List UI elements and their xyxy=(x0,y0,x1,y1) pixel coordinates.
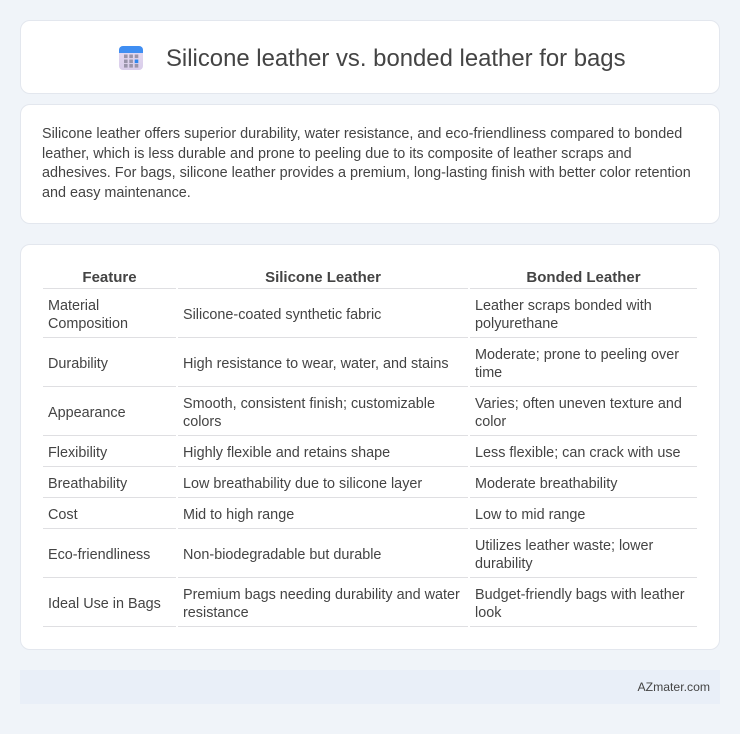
row: durability: time xyxy=(475,365,502,381)
row: flexibility: Less flexible; can crack with use xyxy=(475,445,681,461)
header row xyxy=(82,269,641,286)
row: durability: Durability xyxy=(48,356,108,372)
row: cost xyxy=(48,507,585,523)
text block: summary: leather, which is less durable and prone to peeling due to its composite of leather scraps and xyxy=(42,146,632,162)
row: eco-friendliness: Non-biodegradable but durable xyxy=(183,547,381,563)
row: ideal use in bags: Ideal Use in Bags xyxy=(48,596,161,612)
row: eco-friendliness xyxy=(48,538,654,572)
row: cost: Low to mid range xyxy=(475,507,585,523)
footer bar xyxy=(20,670,720,704)
header row: Bonded Leather xyxy=(526,269,641,286)
row: durability: Moderate; prone to peeling over xyxy=(475,347,679,363)
row: appearance xyxy=(48,396,682,430)
row: durability: High resistance to wear, water, and stains xyxy=(183,356,449,372)
row: material composition: polyurethane xyxy=(475,316,558,332)
row: appearance: color xyxy=(475,414,506,430)
text block: summary: and easy maintenance. xyxy=(42,184,191,200)
row: ideal use in bags xyxy=(48,587,685,621)
text block: summary: Silicone leather offers superior durability, water resistance, and eco-friendliness compared to bonded xyxy=(42,126,682,142)
row: breathability: Moderate breathability xyxy=(475,476,617,492)
row: breathability: Low breathability due to silicone layer xyxy=(183,476,422,492)
header row: Feature xyxy=(82,269,137,286)
row: material composition: Composition xyxy=(48,316,128,332)
title: Silicone leather vs. bonded leather for bags xyxy=(166,45,626,72)
row: appearance: colors xyxy=(183,414,221,430)
row: ideal use in bags: look xyxy=(475,605,501,621)
panel: comparison table xyxy=(20,244,720,650)
text block: summary: adhesives. For bags, silicone leather provides a premium, long-lasting finish with better color retention xyxy=(42,165,691,181)
header row: Silicone Leather xyxy=(265,269,381,286)
row: appearance: Varies; often uneven texture and xyxy=(475,396,682,412)
row: flexibility: Flexibility xyxy=(48,445,107,461)
icon: calendar xyxy=(119,46,143,70)
panel: title card xyxy=(20,20,720,94)
panel: summary xyxy=(20,104,720,224)
row: ideal use in bags: Premium bags needing durability and water xyxy=(183,587,460,603)
text block: summary xyxy=(42,126,691,200)
row: flexibility: Highly flexible and retains shape xyxy=(183,445,390,461)
row: cost: Cost xyxy=(48,507,78,523)
row: material composition: Material xyxy=(48,298,99,314)
row: breathability: Breathability xyxy=(48,476,127,492)
row: cost: Mid to high range xyxy=(183,507,294,523)
row: material composition: Silicone-coated synthetic fabric xyxy=(183,307,381,323)
row: material composition: Leather scraps bonded with xyxy=(475,298,652,314)
row: flexibility xyxy=(48,445,681,461)
row: ideal use in bags: Budget-friendly bags with leather xyxy=(475,587,685,603)
row: breathability xyxy=(48,476,618,492)
footer text: AZmater.com xyxy=(638,680,710,694)
row: eco-friendliness: Eco-friendliness xyxy=(48,547,150,563)
row: material composition xyxy=(48,298,652,332)
row: eco-friendliness: Utilizes leather waste; lower xyxy=(475,538,653,554)
row: appearance: Smooth, consistent finish; customizable xyxy=(183,396,435,412)
comparison table xyxy=(43,269,697,627)
row: appearance: Appearance xyxy=(48,405,126,421)
row: durability xyxy=(48,347,679,381)
row: ideal use in bags: resistance xyxy=(183,605,249,621)
row: eco-friendliness: durability xyxy=(475,556,533,572)
